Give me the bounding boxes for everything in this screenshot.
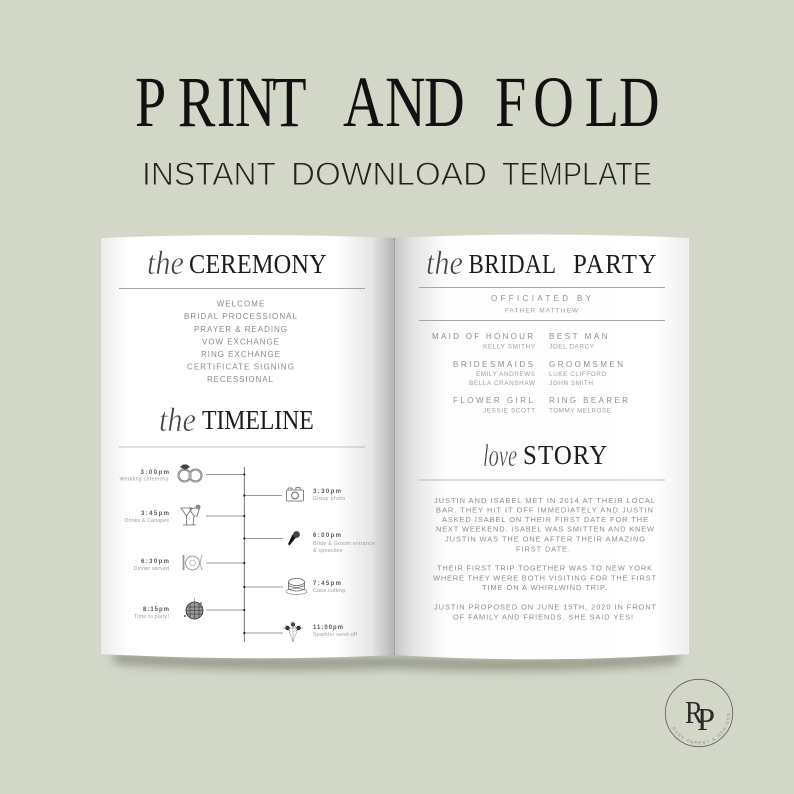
event: group photo xyxy=(312,489,345,502)
logo stamp: RUBY PAPERY & DESIGNS xyxy=(672,714,730,744)
ceremony order list: RECESSIONAL xyxy=(207,375,274,384)
love story text: BAR. THEY HIT IT OFF IMMEDIATELY AND JUSTIN xyxy=(436,506,653,515)
subtitle xyxy=(142,156,652,192)
bride's party column: JESSIE SCOTT xyxy=(483,408,535,414)
bride's party column: FLOWER GIRL xyxy=(453,396,534,405)
officiant: FATHER MATTHEW xyxy=(505,308,579,314)
love story text: WHERE THEY WERE BOTH VISITING FOR THE FIRST xyxy=(433,574,656,582)
event: group photo: 3:30pm xyxy=(313,489,341,495)
groom's party column: JOHN SMITH xyxy=(549,380,593,387)
panel: right page xyxy=(394,234,689,659)
title: FOLD xyxy=(495,61,660,142)
event: speeches: Bride & Groom entrance xyxy=(313,541,375,547)
groom's party column: BEST MAN xyxy=(549,332,608,341)
right page sheet xyxy=(394,234,689,659)
event: wedding ceremony: 3:00pm xyxy=(140,470,169,476)
event: dinner: Dinner served xyxy=(134,566,169,572)
bride's party column: BELLA CRANSHAW xyxy=(469,380,536,387)
event: speeches xyxy=(313,533,375,554)
event: party: Time to party! xyxy=(134,614,170,620)
logo stamp xyxy=(664,678,734,748)
love story text: THEIR FIRST TRIP TOGETHER WAS TO NEW YORK xyxy=(437,564,652,573)
event: group photo: Group photo xyxy=(312,496,345,502)
icon: rings xyxy=(178,464,202,482)
event: drinks xyxy=(124,511,169,524)
groom's party column: RING BEARER xyxy=(549,396,628,405)
groom's party column: TOMMY MELROSE xyxy=(549,408,611,414)
ceremony order list xyxy=(184,300,298,384)
bride's party column: MAID OF HONOUR xyxy=(432,332,533,341)
heading: love story xyxy=(483,437,607,473)
event: cake: 7:45pm xyxy=(313,581,341,587)
groom's party column: LUKE CLIFFORD xyxy=(549,371,606,378)
event: speeches: 6:00pm xyxy=(313,533,341,539)
event: cake: Cake cutting xyxy=(313,588,345,594)
heading: the bridal party: BRIDAL xyxy=(468,250,556,279)
heading: the ceremony: CEREMONY xyxy=(189,249,327,279)
title: PRINT xyxy=(135,61,307,142)
heading: the bridal party: the xyxy=(426,245,463,282)
subtitle: DOWNLOAD xyxy=(291,156,487,192)
heading: the ceremony: the xyxy=(147,245,184,282)
event: speeches: & speeches xyxy=(313,548,343,554)
officiant: OFFICIATED BY xyxy=(491,294,592,303)
icon: cocktails xyxy=(181,505,200,525)
heading: the ceremony xyxy=(147,245,327,282)
ceremony order list: WELCOME xyxy=(217,300,264,308)
bride's party column: EMILY ANDREWS xyxy=(476,371,535,378)
heading: the bridal party xyxy=(426,245,657,282)
logo stamp: R xyxy=(685,694,704,730)
event: drinks: 3:45pm xyxy=(141,511,169,517)
panel: left page xyxy=(101,235,394,658)
heading: love story: STORY xyxy=(523,440,607,470)
event: wedding ceremony: Wedding ceremony xyxy=(120,476,169,482)
love story text: TIME ON A WHIRLWIND TRIP. xyxy=(482,583,607,592)
left page sheet xyxy=(101,235,394,658)
love story text xyxy=(433,496,656,622)
officiant xyxy=(491,294,592,314)
ceremony order list: CERTIFICATE SIGNING xyxy=(187,362,294,372)
icon: sparklers xyxy=(283,621,303,642)
ceremony order list: RING EXCHANGE xyxy=(201,350,280,359)
bride's party column: KELLY SMITHY xyxy=(483,344,536,350)
event: wedding ceremony xyxy=(120,470,169,482)
ceremony order list: BRIDAL PROCESSIONAL xyxy=(184,312,298,321)
groom's party column: JOEL DARCY xyxy=(549,344,595,350)
timeline chart xyxy=(120,464,375,642)
event: dinner xyxy=(134,559,169,572)
logo stamp: P xyxy=(697,701,715,737)
love story text: JUSTIN PROPOSED ON JUNE 15TH, 2020 IN FRONT xyxy=(434,603,656,612)
groom's party column: GROOMSMEN xyxy=(549,360,623,369)
love story text: FIRST DATE. xyxy=(516,544,570,554)
event: dinner: 6:30pm xyxy=(141,559,169,565)
groom's party column xyxy=(549,332,628,414)
heading: the timeline xyxy=(159,402,314,439)
icon: cake xyxy=(286,578,307,594)
event: sparkler send-off: 11:00pm xyxy=(313,625,343,631)
icon: microphone xyxy=(288,531,300,546)
bride's party column xyxy=(432,332,536,414)
love story text: OF FAMILY AND FRIENDS. SHE SAID YES! xyxy=(453,612,633,622)
title: AND xyxy=(343,61,465,142)
subtitle: TEMPLATE xyxy=(502,156,652,192)
event: drinks: Drinks & Canapes xyxy=(124,518,169,524)
ceremony order list: VOW EXCHANGE xyxy=(202,338,279,346)
title xyxy=(135,61,660,142)
event: sparkler send-off xyxy=(313,625,358,638)
heading: love story: love xyxy=(483,437,517,473)
love story text: ASKED ISABEL ON THEIR FIRST DATE FOR THE xyxy=(442,515,648,524)
event: sparkler send-off: Sparkler send-off xyxy=(313,632,358,638)
event: party xyxy=(134,607,170,620)
page shadow xyxy=(112,653,680,670)
event: cake xyxy=(313,581,345,594)
icon: disco ball xyxy=(184,598,203,619)
heading: the timeline: the xyxy=(159,402,196,439)
heading: the timeline: TIMELINE xyxy=(202,405,314,435)
icon: plate and cutlery xyxy=(184,555,202,570)
subtitle: INSTANT xyxy=(142,156,276,192)
icon: camera xyxy=(286,488,304,501)
love story text: NEXT WEEKEND. ISABEL WAS SMITTEN AND KNEW xyxy=(436,525,654,534)
heading: the bridal party: PARTY xyxy=(573,249,657,279)
event: party: 8:15pm xyxy=(143,607,169,613)
bride's party column: BRIDESMAIDS xyxy=(453,360,533,369)
love story text: JUSTIN WAS THE ONE AFTER THEIR AMAZING xyxy=(445,534,645,544)
ceremony order list: PRAYER & READING xyxy=(194,325,287,334)
love story text: JUSTIN AND ISABEL MET IN 2014 AT THEIR LOCAL xyxy=(434,496,655,505)
